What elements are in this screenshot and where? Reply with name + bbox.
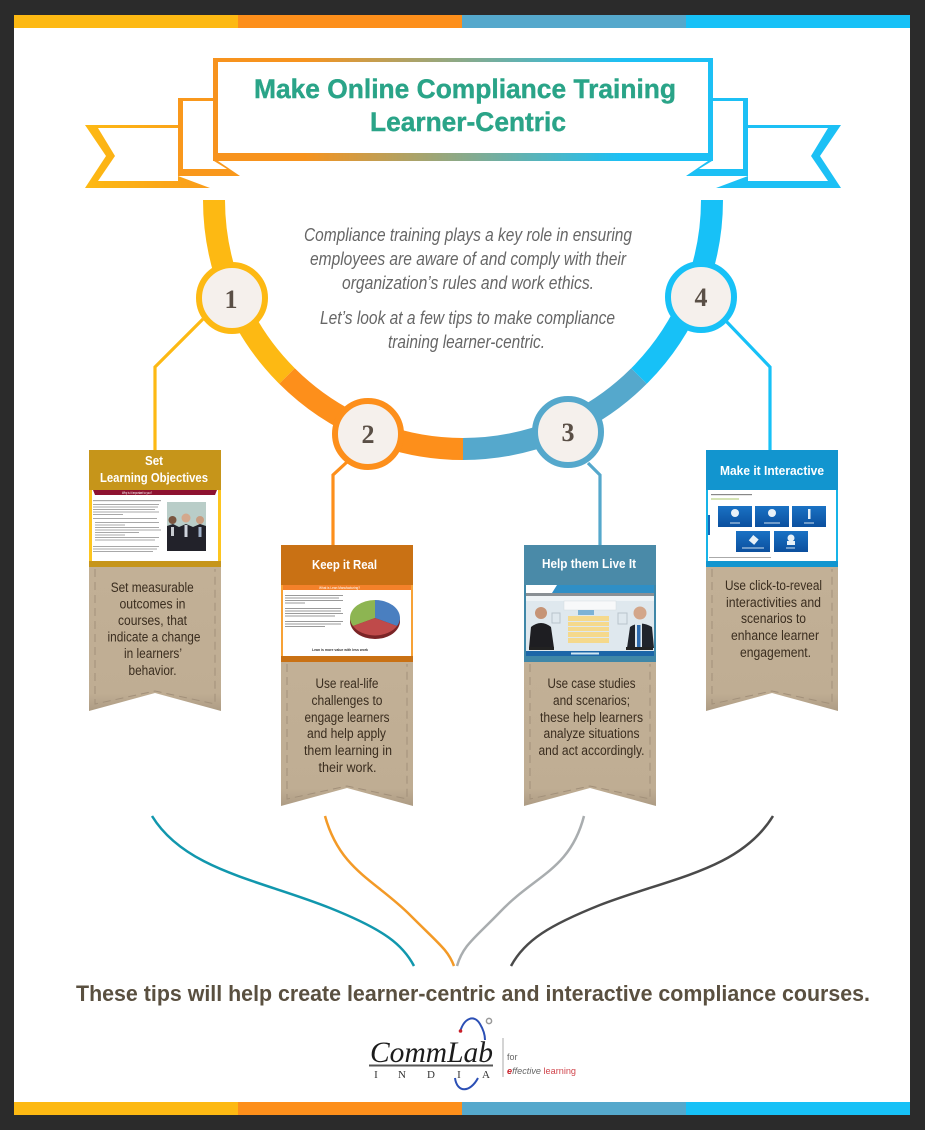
card 1 text: Set measurable <box>111 580 194 595</box>
intro text: organization’s rules and work ethics. <box>342 272 594 293</box>
top colour bar <box>14 15 910 28</box>
logo: CommLab India: effective learning <box>507 1066 576 1077</box>
converging curved lines <box>152 816 773 966</box>
screenshot: objectives slide: Why is it important to you? <box>122 491 152 495</box>
intro text: Let’s look at a few tips to make compliance <box>320 307 615 328</box>
screenshot: lean manufacturing slide <box>283 585 411 652</box>
logo: CommLab India: D <box>427 1069 435 1081</box>
card 4 text <box>725 578 822 660</box>
screenshot: objectives slide <box>93 490 217 552</box>
logo: CommLab India: N <box>398 1069 406 1081</box>
card 2 text: challenges to <box>312 693 382 708</box>
card 1 text: in learners’ <box>124 646 182 661</box>
logo: CommLab India: for <box>507 1052 518 1062</box>
logo: CommLab India: A <box>482 1069 490 1081</box>
card 3 text: and scenarios; <box>553 693 630 708</box>
number badge 4 <box>668 264 734 330</box>
screenshot: lean manufacturing slide: Lean is more value with less work <box>312 648 369 652</box>
logo: CommLab India <box>369 1018 576 1089</box>
card 3 text: these help learners <box>540 710 643 725</box>
card 1 header: Learning Objectives <box>100 470 208 485</box>
card 1 text: indicate a change <box>108 630 200 644</box>
card 2: keep it real <box>281 545 413 806</box>
card 4 text: Use click-to-reveal <box>725 578 822 593</box>
number badge 1: 1 <box>224 285 238 314</box>
pie chart <box>350 600 400 639</box>
card 2 text: and help apply <box>307 726 386 741</box>
closing statement: These tips will help create learner-centric and interactive compliance courses. <box>76 981 870 1006</box>
card 1: set learning objectives <box>89 450 221 711</box>
logo: CommLab India: I <box>457 1069 461 1081</box>
card 4 text: scenarios to <box>741 611 806 626</box>
number badge 1 <box>199 265 265 331</box>
intro text: training learner-centric. <box>388 331 545 352</box>
card 2 text: them learning in <box>304 743 392 758</box>
card 3 text: analyze situations <box>544 726 640 741</box>
card 1 header: Set <box>145 453 164 468</box>
number badge 4: 4 <box>694 283 708 312</box>
card 4 text: interactivities and <box>726 595 821 610</box>
card 2 text: engage learners <box>304 710 390 725</box>
number badge 3: 3 <box>562 418 574 447</box>
card 1 text: behavior. <box>128 663 176 678</box>
title banner <box>213 58 713 161</box>
intro text: Compliance training plays a key role in ensuring <box>304 224 633 245</box>
card 3: help them live it <box>524 545 656 806</box>
bottom colour bar <box>14 1102 910 1115</box>
figure: left businessman <box>529 607 554 650</box>
logo: CommLab India: I <box>374 1069 378 1081</box>
card 1 text: courses, that <box>118 613 187 628</box>
figure: right businessman <box>626 606 654 650</box>
card 2 header: Keep it Real <box>312 557 377 572</box>
card 2 text <box>304 676 392 775</box>
card 1 header <box>100 453 208 485</box>
card 4 header: Make it Interactive <box>720 463 824 478</box>
screenshot: click-to-reveal slide <box>708 494 826 558</box>
card 4 text: enhance learner <box>731 628 819 643</box>
semicircular arc <box>214 200 712 449</box>
number badge 2: 2 <box>362 420 374 449</box>
card 3 text: and act accordingly. <box>538 743 644 758</box>
connector lines <box>155 319 770 547</box>
card 3 header: Help them Live It <box>542 556 637 571</box>
card 2 text: Use real-life <box>316 676 378 691</box>
card 3 text <box>538 676 644 758</box>
screenshot: scenario slide <box>526 585 654 656</box>
card 4 text: engagement. <box>740 645 811 660</box>
title: Make Online Compliance Training <box>254 74 676 104</box>
logo: CommLab India: CommLab <box>370 1036 493 1069</box>
card 2 text: their work. <box>318 760 376 775</box>
number badge 3 <box>535 399 601 465</box>
intro text: employees are aware of and comply with their <box>310 248 627 269</box>
card 1 text <box>108 580 200 678</box>
number badge 2 <box>335 401 401 467</box>
screenshot: lean manufacturing slide: What is Lean Manufacturing? <box>319 586 360 590</box>
left ribbon tail <box>85 98 240 188</box>
card 3 text: Use case studies <box>548 676 636 691</box>
photo: three businessmen <box>167 502 206 551</box>
card 4: make it interactive <box>706 450 838 711</box>
right ribbon tail <box>686 98 841 188</box>
card 1 text: outcomes in <box>120 596 186 612</box>
intro text <box>304 224 633 352</box>
title: Learner-Centric <box>370 107 566 137</box>
